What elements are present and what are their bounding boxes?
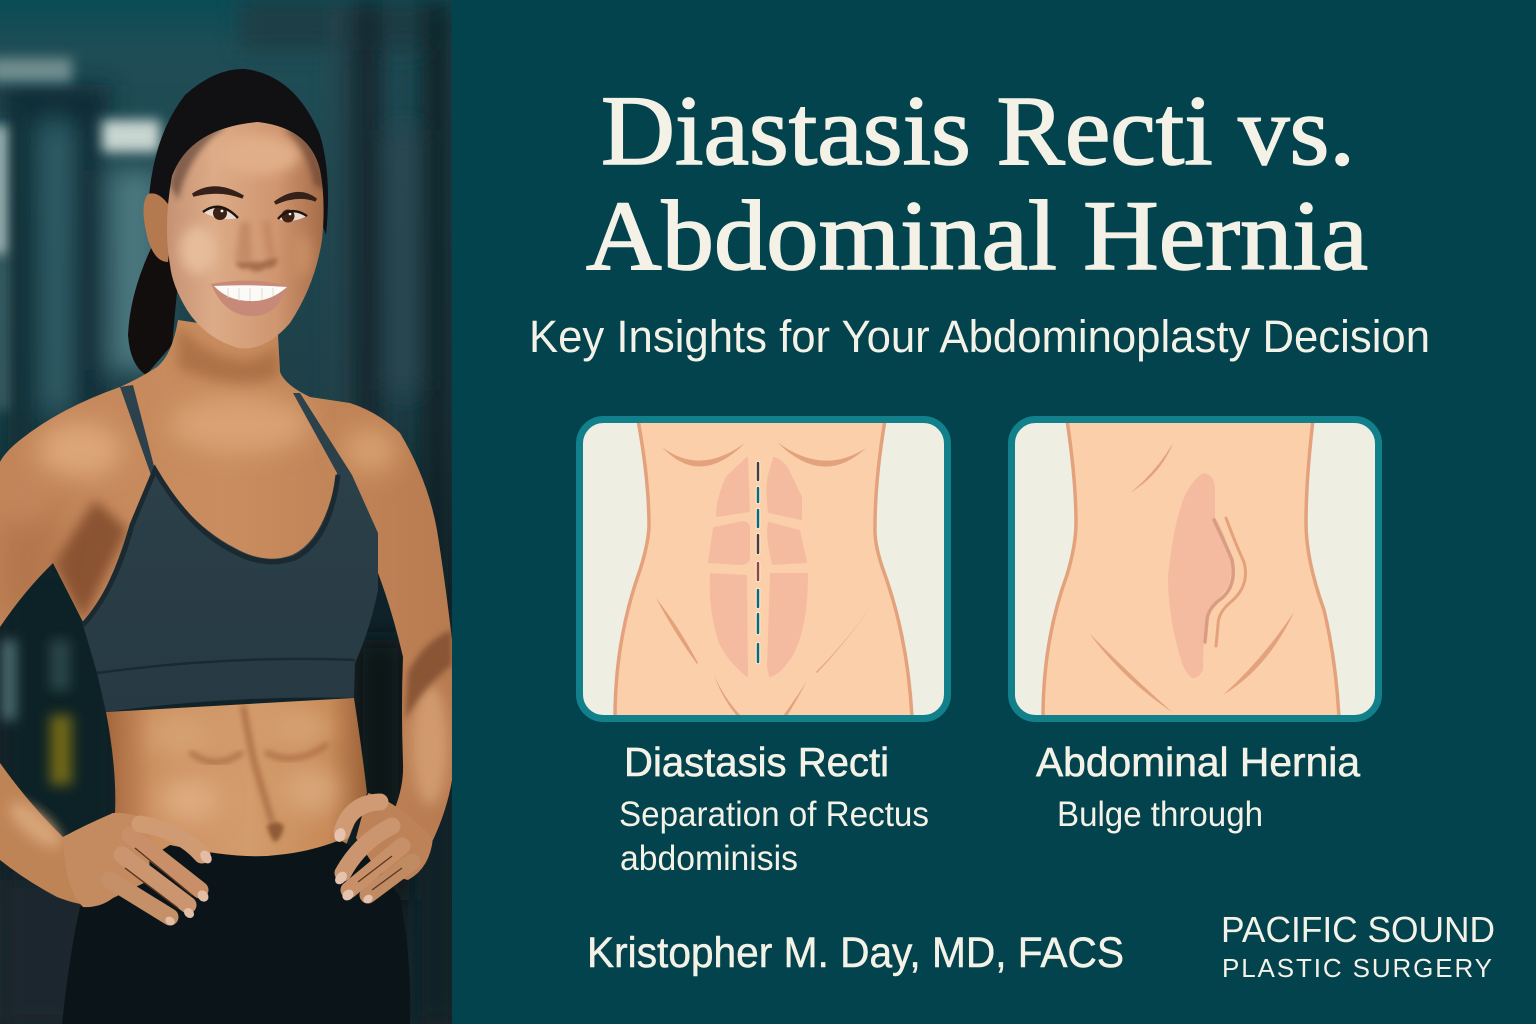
eyes xyxy=(203,206,307,222)
body silhouette: neck shoulders and arms xyxy=(0,320,452,840)
rib and groin creases xyxy=(656,442,872,716)
subtitle: Key Insights for Your Abdominoplasty Decision xyxy=(529,311,1430,362)
caption: diastasis recti xyxy=(619,739,929,878)
smile xyxy=(211,280,288,316)
logo: pacific sound plastic surgery: PLASTIC SURGERY xyxy=(1222,953,1492,983)
ponytail xyxy=(128,248,177,374)
logo: pacific sound plastic surgery: PACIFIC SOUND xyxy=(1221,909,1495,950)
left forearm xyxy=(0,763,113,904)
torso body xyxy=(615,420,912,718)
sports bra xyxy=(83,385,378,712)
face xyxy=(167,120,326,348)
caption: abdominal hernia: Abdominal Hernia xyxy=(1036,739,1360,785)
navel xyxy=(267,822,284,842)
hernia bulge xyxy=(1168,473,1231,678)
skin creases xyxy=(1089,443,1294,712)
caption: diastasis recti: abdominisis xyxy=(620,839,798,878)
right hand xyxy=(333,793,433,905)
title: Diastasis Recti vs. xyxy=(601,75,1355,186)
caption: diastasis recti: Diastasis Recti xyxy=(624,739,889,785)
bulge contour lines xyxy=(1205,518,1246,646)
title: Abdominal Hernia xyxy=(586,180,1368,291)
midline dashed separation xyxy=(756,463,760,662)
left hand xyxy=(63,813,214,927)
photo: woman in sports bra xyxy=(0,0,452,1024)
torso body xyxy=(1043,420,1339,718)
nose xyxy=(235,258,278,272)
ear xyxy=(144,193,168,262)
gym background blurred xyxy=(0,0,452,1024)
logo: pacific sound plastic surgery xyxy=(1221,909,1495,983)
rectus muscle blocks xyxy=(709,458,807,676)
panel: abdominal hernia illustration xyxy=(1012,420,1378,718)
panel: diastasis recti illustration xyxy=(580,420,948,718)
caption: abdominal hernia xyxy=(1036,739,1360,834)
surgeon name: Kristopher M. Day, MD, FACS xyxy=(587,929,1124,977)
caption: abdominal hernia: Bulge through xyxy=(1057,795,1263,834)
background: teal right panel xyxy=(452,0,1536,1024)
hair xyxy=(148,69,328,250)
caption: diastasis recti: Separation of Rectus xyxy=(619,795,929,834)
eyebrows xyxy=(193,188,316,203)
pants xyxy=(62,840,410,1024)
torso with abs xyxy=(106,698,367,860)
title xyxy=(586,75,1368,291)
